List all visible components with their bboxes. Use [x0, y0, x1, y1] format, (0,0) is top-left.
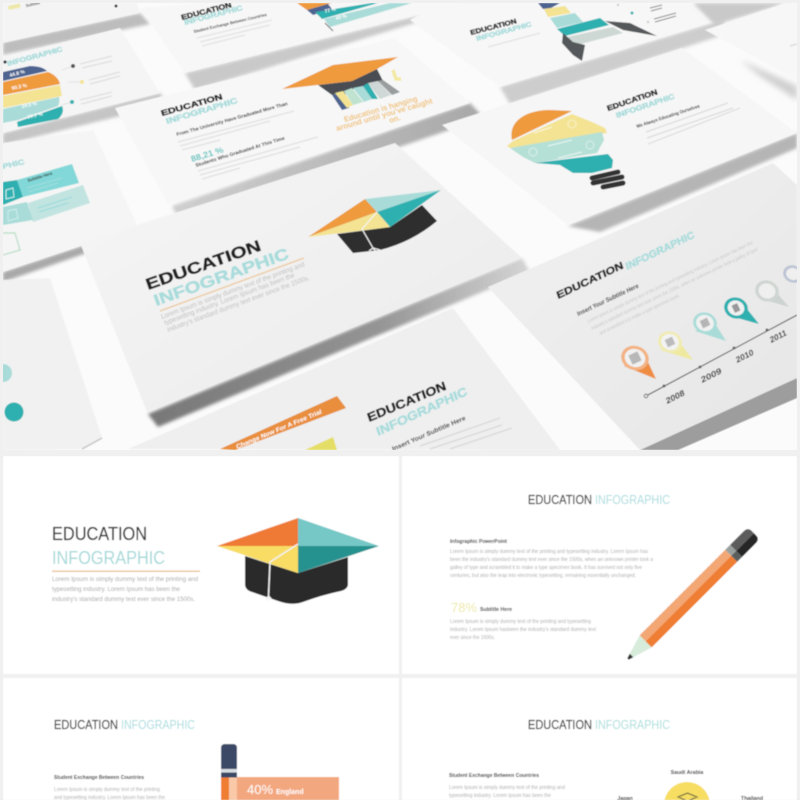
stat: 78%: ever since the 1500s. [450, 635, 495, 641]
cover body text [52, 576, 198, 603]
slide: head infographic: INFOGRAPHIC [6, 46, 64, 68]
slide: bottom center [128, 308, 560, 453]
cover body text: Lorem Ipsum is simply dummy text of the printing and [52, 576, 198, 583]
icon: cap over books [282, 57, 401, 110]
text block: powerpoint: Infographic PowerPoint [450, 539, 507, 545]
slide: graduation cap with books: EDUCATION [160, 92, 224, 118]
slide: graduation cap with books: INFOGRAPHIC [165, 96, 239, 126]
stat: 78%: 78% [451, 600, 477, 615]
cover body text: industry's standard dummy text ever since the 1500s. [52, 596, 195, 603]
circle with cap icon [664, 782, 710, 800]
stat: 78% [450, 600, 597, 641]
text block: powerpoint: Lorem Ipsum is simply dummy text of the printing and typesetting industry. Lorem Ipsum has [450, 549, 648, 555]
heading: EDUCATION [528, 493, 592, 507]
slide: bottom center: INFOGRAPHIC [374, 384, 469, 439]
cover body text: typesetting industry. Lorem Ipsum has been the [52, 586, 180, 593]
country labels: Saudi Arabia [671, 770, 704, 776]
slide: main graduation cap [80, 143, 530, 427]
head labels [62, 56, 120, 105]
slide: graduation cap with books: 88,21 % [189, 144, 225, 164]
stat: 78%: industry. Lorem Ipsum hasbeen the industry's standard dummy text [450, 627, 597, 633]
slide: timeline: industry's standard dummy text ever since the 1500s, when an unknown printer took a galley of type [591, 247, 759, 332]
slide: timeline: and scrambled it to make a type specimen book. [599, 293, 681, 337]
text block: powerpoint: been the industry's standard dummy text ever since the 1500s, when an unknown printer took a [450, 557, 653, 563]
slide: bottom left partial [0, 278, 102, 450]
slide: rocket: INFOGRAPHIC [476, 21, 533, 43]
main title: Lorem Ipsum is simply dummy text of the printing and [160, 261, 306, 321]
rocket labels [617, 4, 676, 23]
slide: bulb: INFOGRAPHIC [615, 91, 676, 120]
slide: rocket [410, 3, 732, 104]
slide: top middle: EDUCATION [180, 0, 233, 22]
text block: Student Exchange Between Countries [54, 775, 144, 781]
year labels: 2011 [769, 328, 788, 345]
stat: 78%: Lorem Ipsum is simply dummy text of the printing and typesetting [450, 619, 591, 625]
slide: timeline [488, 163, 800, 450]
panel: exchange bars slide [3, 678, 399, 800]
head silhouette bands [3, 66, 63, 127]
pin 2010 [692, 312, 726, 342]
slide: bottom center: Insert Your Subtitle Here [391, 415, 467, 453]
orange banner [220, 396, 346, 451]
pin 2009 [658, 331, 693, 360]
orange statement: Education is hanging [343, 94, 419, 124]
slide: timeline: Lorem Ipsum is simply dummy text of the printing and typesetting industry. Lorem Ipsum has been the [587, 240, 754, 325]
panel: cover slide [3, 456, 399, 674]
main title [144, 238, 311, 334]
head silhouette bands: 24.5 % [21, 101, 38, 110]
slide: bulb [442, 48, 797, 232]
icon: pencil [622, 527, 760, 665]
icon: vertical pencil [221, 744, 237, 800]
pin 2008 [620, 345, 656, 380]
orange banner: Change Now For A Free Trial [236, 409, 323, 451]
text block: powerpoint: galley of type and scrambled it to make a type specimen book. It has survived not only five [450, 565, 642, 571]
heading: EDUCATION [528, 718, 592, 732]
panel: exchange bars slide: INFOGRAPHIC [121, 718, 195, 732]
icon: main cap [308, 190, 441, 253]
orange statement: on. [388, 113, 402, 125]
slide: top middle: INFOGRAPHIC [183, 3, 244, 27]
slide: teal list: PHIC [1, 157, 27, 171]
text block [54, 775, 165, 800]
subtitle: INFOGRAPHIC [52, 548, 165, 568]
bar: 40% England [237, 777, 339, 800]
stat: 78%: Subtitle Here [480, 607, 512, 613]
slide: bottom center: EDUCATION [365, 379, 448, 425]
head silhouette bands: 44.8 % [9, 69, 26, 79]
slide: head infographic [3, 28, 168, 145]
panel: pencil slide: INFOGRAPHIC [595, 493, 670, 507]
slide: top middle: Student Exchange Between Countries [193, 12, 268, 34]
slide: timeline: EDUCATION [555, 261, 625, 302]
text block: Lorem Ipsum is simply dummy text of the printing [54, 787, 160, 793]
tilted bars [297, 3, 412, 31]
text block: Lorem Ipsum is simply dummy text of the printing and [449, 785, 565, 791]
pin grey [755, 280, 788, 307]
panel: countries slide [402, 678, 797, 800]
main title: industry's standard dummy text ever since the 1500s. [166, 275, 311, 334]
slide: top left partial: Subtitle [25, 0, 41, 8]
slide: rocket: EDUCATION [470, 18, 518, 37]
tilted bars: 40 % [335, 13, 348, 22]
mockup scene: perspective slides [0, 0, 800, 453]
list rows [3, 164, 90, 225]
bar: 40% England: England [276, 789, 304, 796]
slide: top middle [180, 3, 418, 88]
panel: pencil slide [402, 456, 797, 674]
slide: teal list [3, 140, 90, 280]
text block: Student Exchange Between Countries [449, 773, 539, 779]
text block: powerpoint: centuries, but also the leap into electronic typesetting, remaining essentially unchanged. [450, 573, 636, 579]
text block: typesetting industry. Lorem Ipsum has been the [449, 793, 551, 799]
slide: timeline: Insert Your Subtitle Here [576, 283, 640, 318]
head silhouette bands: 77.7 % [27, 111, 44, 121]
slide: timeline: INFOGRAPHIC [624, 230, 696, 273]
main title: INFOGRAPHIC [152, 246, 292, 310]
bar: 40% England: 40% [247, 782, 273, 797]
slide: bulb: We Always Educating Ourselves [636, 103, 701, 129]
pin navy [782, 265, 797, 283]
head silhouette bands: 90.3 % [11, 83, 28, 92]
orange statement: around until you've caught [335, 96, 434, 133]
tilted bars: 77 % [324, 6, 337, 15]
icon: light bulb [507, 110, 623, 187]
slide: graduation cap with books: Students Who Graduated At This Time [195, 136, 286, 169]
main title: typesetting industry. Lorem Ipsum has been the [163, 272, 296, 327]
pin 2011 [724, 296, 760, 324]
text block: powerpoint [450, 539, 653, 579]
heading: EDUCATION [54, 718, 118, 732]
title: EDUCATION [52, 524, 147, 544]
year labels: 2008 [665, 388, 686, 406]
icon: rocket [538, 3, 657, 61]
slide: far right partial [693, 3, 797, 100]
year labels: 2010 [735, 347, 755, 365]
year labels [665, 328, 788, 406]
icon: graduation cap [217, 518, 379, 604]
panel: countries slide: INFOGRAPHIC [595, 718, 670, 732]
slide: graduation cap with books: From The University Have Graduated More Than [176, 101, 289, 138]
slide: top left partial [3, 0, 150, 55]
text block [449, 773, 565, 799]
main title: EDUCATION [144, 238, 263, 294]
slide: graduation cap with books [115, 56, 480, 213]
year labels: 2009 [700, 366, 723, 385]
list rows: Subtitle Here [27, 170, 54, 183]
country labels [617, 770, 763, 800]
slide: bulb: EDUCATION [606, 87, 659, 113]
timeline axis [644, 315, 797, 398]
